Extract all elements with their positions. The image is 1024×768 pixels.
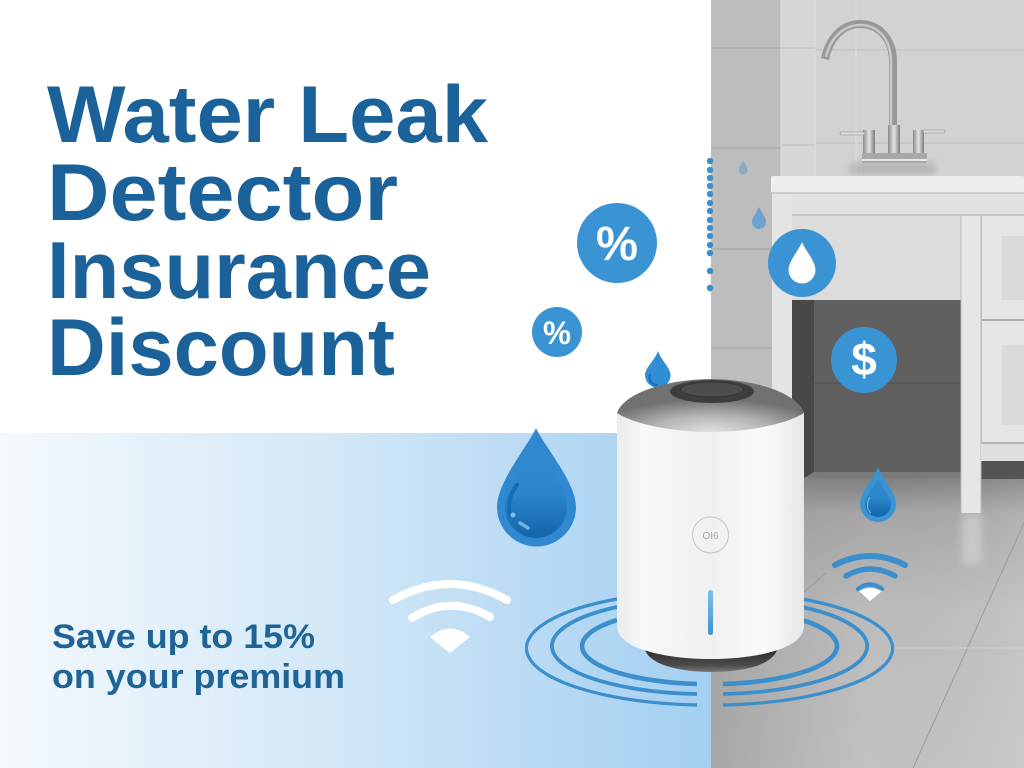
icon: right water drop <box>860 467 896 522</box>
icon: dollar badge: $ <box>851 333 877 385</box>
device body <box>617 412 804 659</box>
headline <box>47 70 489 393</box>
vanity cabinet <box>771 176 1024 513</box>
faucet <box>825 24 945 163</box>
icon: large water drop <box>497 428 576 546</box>
detection ripple rings <box>526 599 893 705</box>
icon: percent badge small: % <box>543 315 571 351</box>
subheading: savings: on your premium <box>52 658 345 696</box>
icon: percent badge small <box>532 307 582 357</box>
headline: Insurance <box>47 226 431 316</box>
icon: small drop behind device <box>645 351 671 388</box>
floor <box>711 478 1024 768</box>
leak detector device <box>617 379 804 672</box>
icon: white wifi signal <box>393 584 507 653</box>
icon: percent badge large <box>577 203 657 283</box>
drawers <box>982 216 1024 319</box>
subheading: savings <box>52 618 345 696</box>
headline: Detector <box>47 148 398 238</box>
cabinet front panel <box>792 193 1024 216</box>
device logo <box>692 517 728 553</box>
under-cabinet recess <box>792 300 961 478</box>
bathroom scene <box>711 0 1024 768</box>
wall tiles <box>711 0 1024 480</box>
cabinet legs <box>772 193 792 408</box>
icon: percent badge large: % <box>596 218 638 271</box>
icon: faint wall droplet large <box>752 207 766 229</box>
headline: Discount <box>47 303 395 393</box>
headline: Water Leak <box>47 70 489 160</box>
device top dome <box>617 379 804 432</box>
dotted leak line <box>707 158 713 291</box>
countertop <box>771 176 1024 193</box>
background: white upper panel <box>0 0 711 433</box>
device logo: OI6 <box>702 531 719 542</box>
subheading: savings: Save up to 15% <box>52 618 315 656</box>
icon: water drop badge <box>768 229 836 297</box>
background: blue gradient lower panel <box>0 433 711 768</box>
icon: faint wall droplet <box>738 160 748 174</box>
icon: dollar badge <box>831 327 897 393</box>
device status light <box>708 590 713 635</box>
device base <box>645 650 777 672</box>
device top button <box>670 380 754 403</box>
icon: floor wifi signal <box>835 556 905 601</box>
